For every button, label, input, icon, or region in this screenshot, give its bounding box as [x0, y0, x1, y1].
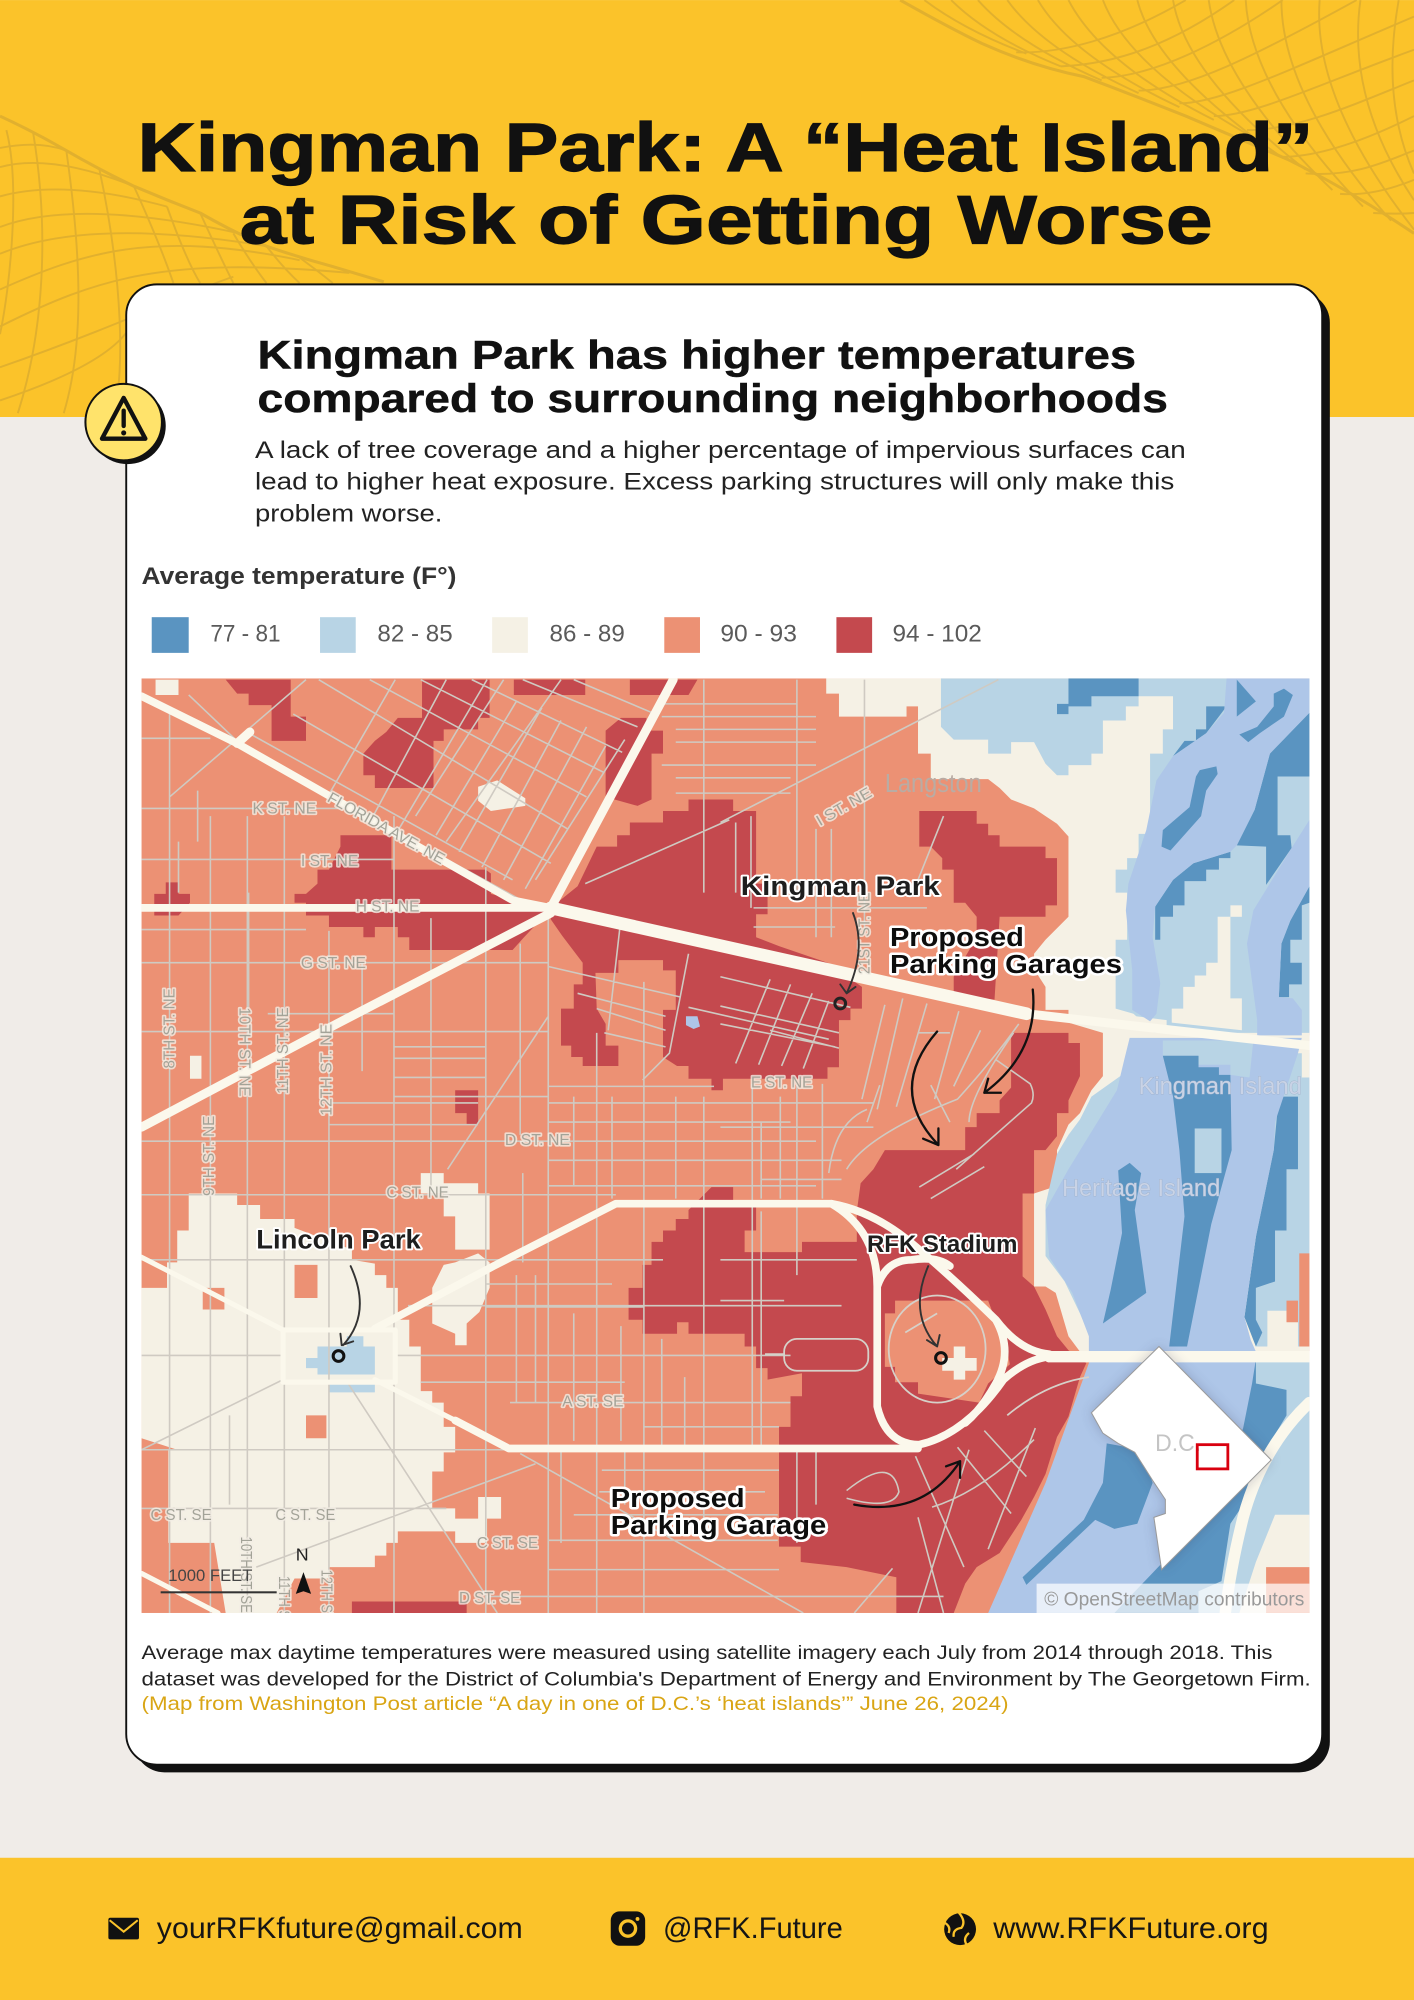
- legend: [142, 563, 982, 653]
- map: street labels: K ST. NE: [252, 801, 316, 818]
- map: [142, 678, 1309, 1627]
- icon: warning: [85, 384, 166, 464]
- map source note: [142, 1642, 1311, 1715]
- map: street labels: 8TH ST. NE: [162, 988, 179, 1069]
- intro text: [255, 437, 1186, 528]
- map: stadium access streets: [765, 1295, 1089, 1415]
- map: street labels: Langston: [885, 770, 982, 798]
- north arrow: N: [296, 1545, 309, 1565]
- map: river islands: [1023, 680, 1293, 1585]
- map: cool east zone: [826, 678, 1309, 1613]
- map: street labels: 11TH ST. NE: [275, 1007, 292, 1094]
- map: street labels: G ST. NE: [301, 955, 366, 972]
- contact: email: yourRFKfuture@gmail.com: [157, 1912, 523, 1945]
- callout: Proposed Parking Garages: Parking Garages: [890, 951, 1122, 979]
- map: minor streets: [142, 680, 1035, 1613]
- legend: Average temperature (F°): [142, 563, 456, 590]
- contact: instagram: @RFK.Future: [663, 1912, 843, 1945]
- panel heading: Kingman Park has higher temperatures: [258, 334, 1136, 378]
- intro text: A lack of tree coverage and a higher percentage of impervious surfaces can: [255, 437, 1186, 464]
- title: [138, 109, 1313, 259]
- callout: Lincoln Park: Lincoln Park: [256, 1224, 421, 1254]
- map: street labels: I ST. NE: [301, 853, 358, 870]
- map: street labels: H ST. NE: [356, 899, 419, 916]
- map: street labels: D ST. NE: [505, 1132, 570, 1149]
- legend: 86 - 89: [550, 620, 625, 647]
- map: street labels: 12TH ST. NE: [319, 1024, 336, 1116]
- map: street labels: 11TH ST: [275, 1576, 292, 1627]
- map: street labels: Heritage Island: [1062, 1175, 1220, 1202]
- panel: main card: [85, 284, 1322, 1765]
- map: main roads: [142, 680, 1309, 1613]
- map source note: dataset was developed for the District of Columbia's Department of Energy and Environment by The Georgetown Firm.: [142, 1669, 1311, 1691]
- title: at Risk of Getting Worse: [240, 182, 1213, 259]
- map: street labels: C ST. NE: [386, 1184, 449, 1201]
- map: street labels: 10TH ST. NE: [236, 1007, 253, 1097]
- map: street labels: Kingman Island: [1139, 1073, 1302, 1100]
- map: street labels: I ST. NE: [813, 784, 875, 830]
- map: street labels: C ST. SE: [275, 1507, 335, 1524]
- title: Kingman Park: A “Heat Island”: [138, 109, 1313, 186]
- legend: 94 - 102: [893, 620, 982, 647]
- callout: Proposed Parking Garage: Parking Garage: [611, 1512, 826, 1540]
- map: street labels: 10TH ST. SE: [237, 1536, 254, 1613]
- attribution: [1037, 1584, 1309, 1613]
- map: street labels: A ST. SE: [562, 1393, 623, 1410]
- map: street labels: D ST. SE: [459, 1590, 520, 1607]
- legend: 77 - 81: [210, 620, 281, 647]
- callout: Proposed Parking Garages: [890, 924, 1122, 1145]
- footer band: [0, 1858, 1414, 2000]
- callout: Proposed Parking Garage: [611, 1461, 960, 1540]
- map: Lincoln Park cool area: [142, 680, 525, 1613]
- map: street labels: 9TH ST. NE: [201, 1116, 218, 1196]
- inset: D.C. locator: [1091, 1346, 1271, 1570]
- callout: Proposed Parking Garage: Proposed: [611, 1485, 745, 1513]
- map: river: [988, 678, 1309, 1613]
- map: street labels: E ST. NE: [751, 1075, 812, 1092]
- icon: email: [108, 1918, 139, 1939]
- intro text: lead to higher heat exposure. Excess parking structures will only make this: [255, 469, 1174, 496]
- scale bar: 1000 FEET: [168, 1566, 252, 1585]
- callout: RFK Stadium: RFK Stadium: [867, 1231, 1017, 1258]
- callout: Proposed Parking Garages: Proposed: [890, 924, 1024, 952]
- panel heading: [258, 334, 1168, 421]
- map: street labels: 21ST ST. NE: [857, 893, 874, 974]
- north arrow: [296, 1545, 311, 1594]
- legend: 82 - 85: [377, 620, 453, 647]
- header band: [0, 0, 1414, 417]
- card shadow: [134, 292, 1330, 1772]
- map source note: Average max daytime temperatures were measured using satellite imagery each July from 2014 through 2018. This: [142, 1642, 1273, 1664]
- callout: RFK Stadium: [867, 1231, 1017, 1363]
- callout: Kingman Park: Kingman Park: [741, 871, 940, 901]
- intro text: problem worse.: [255, 501, 442, 528]
- map source note: (Map from Washington Post article “A day in one of D.C.’s ‘heat islands’” June 26, 2024): [142, 1693, 1009, 1715]
- attribution: © OpenStreetMap contributors: [1044, 1589, 1304, 1610]
- map: hottest areas: [154, 680, 1086, 1613]
- map: street labels: [150, 770, 1302, 1627]
- callout: Kingman Park: [741, 871, 940, 1009]
- map: street labels: FLORIDA AVE. NE: [324, 789, 448, 868]
- callout: Lincoln Park: [256, 1224, 421, 1361]
- scale bar: [160, 1570, 277, 1594]
- panel heading: compared to surrounding neighborhoods: [258, 377, 1168, 421]
- map: stadium cooler patch: [686, 1016, 1010, 1403]
- map: street labels: 12TH ST: [317, 1570, 334, 1621]
- map: street labels: C ST. SE: [477, 1535, 538, 1552]
- contact: website: www.RFKFuture.org: [992, 1912, 1269, 1945]
- icon: globe: [944, 1913, 976, 1945]
- map: street labels: C ST. SE: [150, 1507, 212, 1524]
- icon: instagram: [611, 1911, 645, 1946]
- legend: 90 - 93: [720, 620, 797, 647]
- map: dark blue patches: [1114, 706, 1309, 1613]
- inset: D.C. locator: D.C.: [1155, 1430, 1201, 1457]
